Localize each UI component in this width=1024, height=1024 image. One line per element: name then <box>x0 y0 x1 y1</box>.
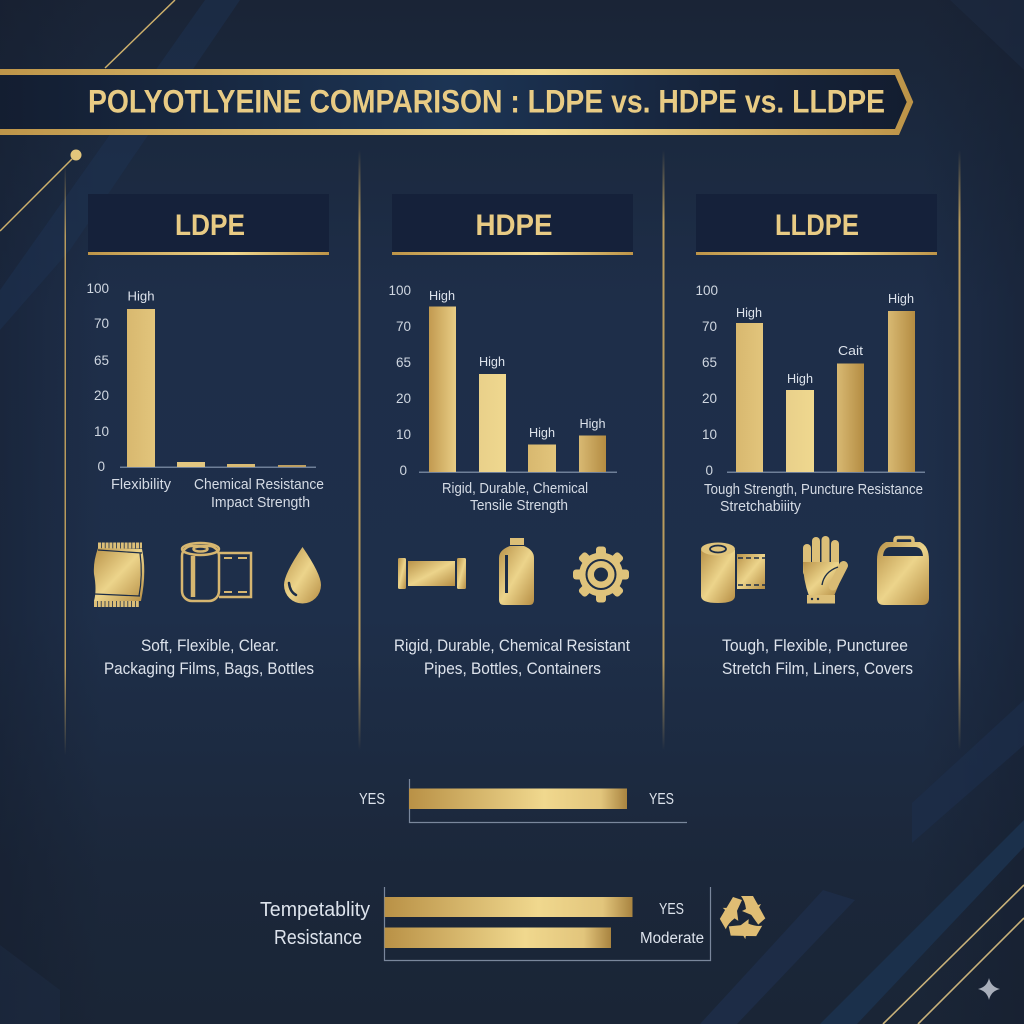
description: LDPE <box>104 636 314 678</box>
icon: water drop <box>284 547 321 604</box>
bar chart: HDPE: High <box>580 416 606 431</box>
icon: glove <box>803 536 844 604</box>
description: LDPE: Soft, Flexible, Clear. <box>141 636 279 655</box>
heading: LDPE <box>88 194 329 255</box>
bar chart: HDPE: High <box>529 425 555 440</box>
bar chart: YES comparison: YES <box>649 791 674 808</box>
icon: tote bag <box>877 538 929 605</box>
decorative gold line with dot <box>0 150 82 231</box>
bar chart: LLDPE: High <box>736 305 762 320</box>
bar chart: temperability and resistance: Resistance <box>274 927 362 949</box>
bar chart: LLDPE: High <box>787 371 813 386</box>
icon: recycling <box>716 896 771 944</box>
title banner: POLYOTLYEINE COMPARISON : LDPE vs. HDPE vs. LLDPE <box>88 84 885 120</box>
bar chart: HDPE: High <box>479 354 505 369</box>
heading: LLDPE <box>696 194 937 255</box>
icon: bottle <box>499 538 534 605</box>
bar chart: LDPE: 65 <box>94 353 109 368</box>
description: LLDPE: Stretch Film, Liners, Covers <box>722 659 913 678</box>
bar chart: LLDPE: 10 <box>702 427 717 442</box>
bar chart: LDPE: 10 <box>94 424 109 439</box>
heading: HDPE <box>392 194 633 255</box>
bar chart: HDPE: 65 <box>396 355 411 370</box>
bar chart: HDPE: 10 <box>396 427 411 442</box>
icon: sparkle <box>978 978 1000 1000</box>
bar chart: LDPE: Impact Strength <box>211 495 310 511</box>
bar chart: LDPE: 100 <box>86 281 109 296</box>
bar chart: LLDPE: Tough Strength, Puncture Resistance <box>704 482 923 498</box>
description: HDPE: Pipes, Bottles, Containers <box>424 659 601 678</box>
bar chart: LLDPE: 0 <box>705 463 713 478</box>
bar chart: HDPE: 0 <box>399 463 407 478</box>
description: HDPE <box>394 636 630 678</box>
bar chart: LLDPE: Stretchabiiity <box>720 499 802 515</box>
icon: pouch <box>94 546 144 604</box>
bar chart: LLDPE <box>695 283 925 515</box>
bar chart: LLDPE: 65 <box>702 355 717 370</box>
panel: LLDPE <box>695 194 937 678</box>
heading: HDPE: HDPE <box>476 209 552 242</box>
bar chart: HDPE: Tensile Strength <box>470 498 568 514</box>
bar chart: HDPE: Rigid, Durable, Chemical <box>442 481 588 497</box>
bar chart: LDPE <box>86 281 324 511</box>
heading: LDPE: LDPE <box>175 209 245 242</box>
bar chart: YES comparison: YES <box>359 791 385 808</box>
panel: HDPE <box>388 194 633 678</box>
bar chart: LLDPE: 100 <box>695 283 718 298</box>
icon: pipe <box>398 558 466 589</box>
bar chart: temperability and resistance: Tempetablity <box>260 899 370 921</box>
bar chart: HDPE <box>388 283 617 514</box>
description: LLDPE <box>722 636 913 678</box>
bar chart: LLDPE: 20 <box>702 391 717 406</box>
bar chart: LDPE: Flexibility <box>111 477 172 493</box>
description: LDPE: Packaging Films, Bags, Bottles <box>104 659 314 678</box>
bar chart: temperability and resistance: YES <box>659 901 684 918</box>
bar chart: LDPE: 0 <box>97 459 105 474</box>
bar chart: LLDPE: High <box>888 291 914 306</box>
description: HDPE: Rigid, Durable, Chemical Resistant <box>394 636 630 655</box>
icon: film roll outline <box>182 543 251 601</box>
bar chart: temperability and resistance <box>260 887 710 960</box>
bar chart: LDPE: High <box>128 288 154 304</box>
bar chart: HDPE: 70 <box>396 319 411 334</box>
bar chart: LDPE: 70 <box>94 316 109 331</box>
decorative gold line: top left <box>105 0 175 68</box>
bar chart: LDPE: Chemical Resistance <box>194 477 324 493</box>
icon: gear <box>573 546 629 602</box>
description: LLDPE: Tough, Flexible, Puncturee <box>722 636 908 655</box>
bar chart: LDPE: 20 <box>94 388 109 403</box>
bar chart: LLDPE: 70 <box>702 319 717 334</box>
decorative gold lines: bottom right <box>883 885 1024 1024</box>
bar chart: HDPE: High <box>429 288 455 303</box>
bar chart: LLDPE: Cait <box>838 343 863 358</box>
icon: film roll solid <box>701 542 765 603</box>
panel: LDPE <box>86 194 329 678</box>
title banner <box>0 72 910 132</box>
heading: LLDPE: LLDPE <box>775 209 859 242</box>
bar chart: temperability and resistance: Moderate <box>640 930 704 947</box>
bar chart: HDPE: 20 <box>396 391 411 406</box>
bar chart: YES comparison <box>359 779 687 822</box>
bar chart: HDPE: 100 <box>388 283 411 298</box>
